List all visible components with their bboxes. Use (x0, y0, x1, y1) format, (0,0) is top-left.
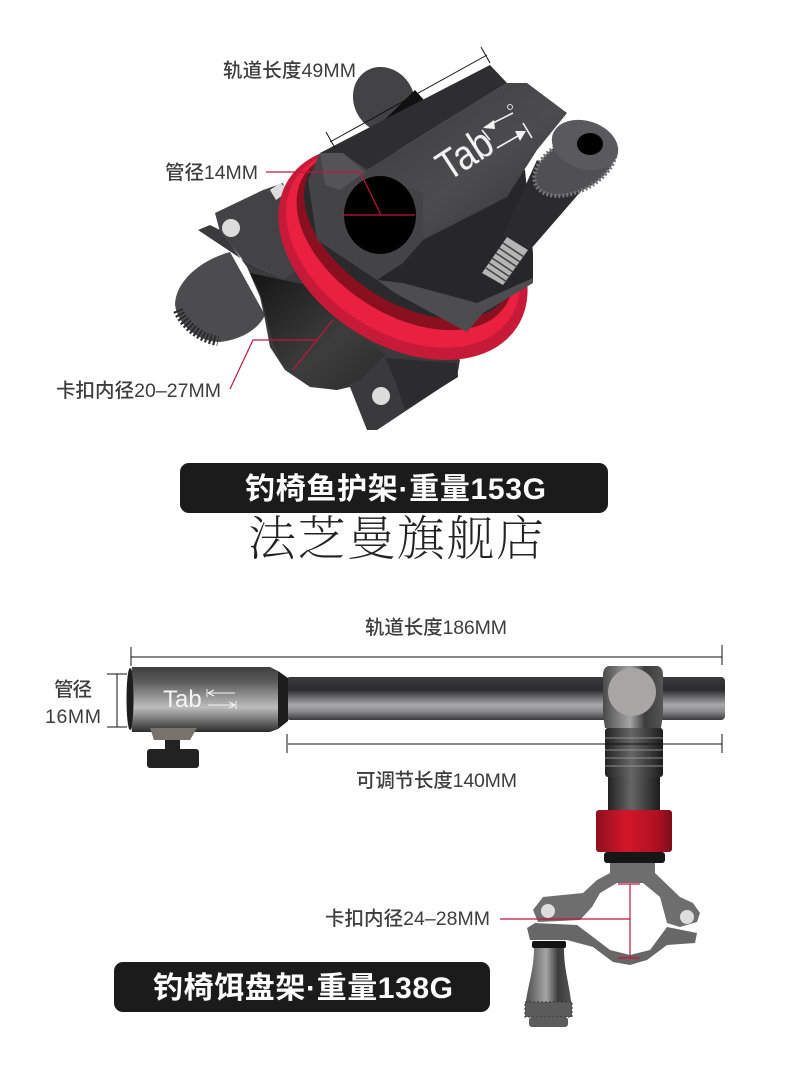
dimension: rail length 49mm: 轨道长度49MM (223, 60, 356, 82)
title bar: keep-net holder 153G (180, 463, 608, 513)
dimension: clamp inner diameter 20-27mm: 卡扣内径20–27MM (56, 380, 221, 402)
black gasket (604, 852, 665, 863)
dimension: clamp inner diameter 24-28mm: 卡扣内径24–28MM (325, 908, 490, 930)
horizontal rod (286, 677, 725, 720)
dimension: tube diameter 16mm: 16MM (45, 706, 101, 728)
dimension: tube diameter 16mm: 管径 (54, 679, 92, 701)
rod head with logo (126, 667, 288, 732)
store name watermark: 法芝曼旗舰店 (248, 513, 544, 566)
tube bore (344, 176, 416, 254)
title bar: keep-net holder 153G: 钓椅鱼护架·重量153G (245, 473, 546, 506)
product: fishing chair keep-net holder (175, 56, 626, 430)
clamp body (198, 183, 460, 430)
dimension: clamp inner diameter 24-28mm (325, 884, 640, 958)
logo: Tab: Tab (427, 119, 502, 190)
dimension: tube diameter 14mm: 管径14MM (165, 162, 258, 184)
threaded section (605, 728, 663, 777)
red ring (239, 102, 567, 404)
junction block (603, 666, 663, 728)
product: bait tray holder (126, 666, 725, 1027)
bar clamp (527, 863, 700, 965)
dimension: rail length 49mm (223, 47, 490, 148)
right thumb knob (503, 112, 626, 250)
dimension: tube diameter 16mm (45, 674, 127, 728)
vertical post (608, 777, 660, 811)
clamp tightening knob (525, 941, 572, 1027)
screw thread (482, 237, 528, 285)
title bar: bait tray holder 138G (114, 962, 490, 1012)
mount thumb screw (147, 728, 199, 768)
red collar (596, 810, 672, 852)
hex base (377, 160, 533, 332)
title bar: bait tray holder 138G: 钓椅饵盘架·重量138G (153, 972, 453, 1005)
dimension: clamp inner diameter 20-27mm (56, 320, 333, 402)
dimension: rail length 186mm: 轨道长度186MM (365, 617, 507, 639)
dimension: adjustable length 140mm: 可调节长度140MM (356, 770, 517, 792)
dimension: adjustable length 140mm (287, 734, 722, 792)
rod head with logo: Tab (163, 686, 202, 713)
main tube block (308, 65, 567, 280)
back thumb knob (341, 56, 427, 144)
dimension: rail length 186mm (131, 617, 722, 666)
dimension: tube diameter 14mm (165, 162, 415, 215)
icon: handle knob lower left (175, 252, 265, 342)
